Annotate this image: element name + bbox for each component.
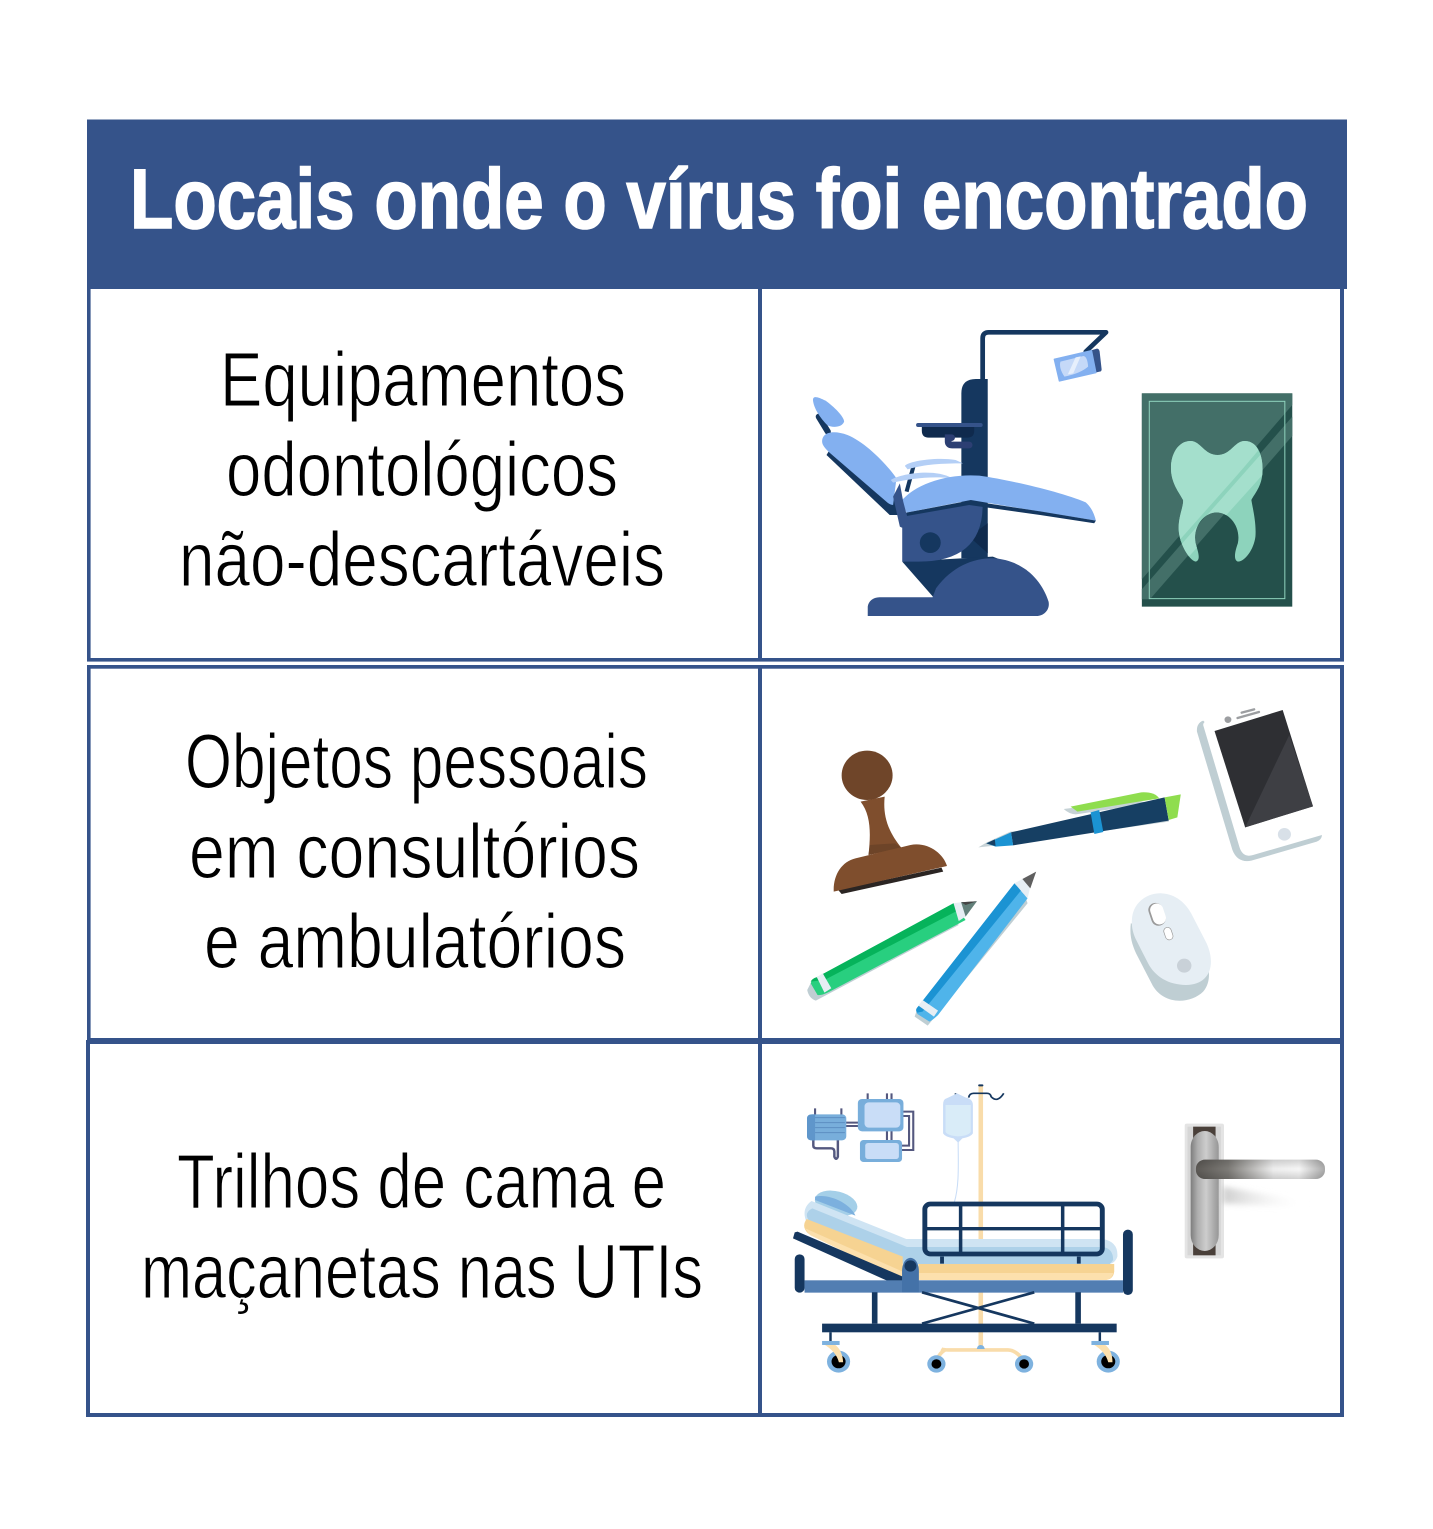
text: bed rails and door handles: Trilhos de cama e (177, 1139, 666, 1225)
text: personal objects: em consultórios (189, 809, 640, 895)
text: dental equipment: odontológicos (226, 427, 618, 513)
icon: iv drip stand (927, 1084, 1033, 1373)
title banner (87, 120, 1347, 289)
text: dental equipment: Equipamentos (220, 337, 626, 423)
icon: rubber stamp (834, 751, 947, 894)
icon: computer mouse (1130, 893, 1211, 1001)
text: dental equipment: não-descartáveis (179, 517, 665, 603)
icon: blue pencil (915, 872, 1036, 1026)
table grid (86, 285, 1344, 1417)
icon: smartphone (1197, 702, 1322, 861)
icon: green pencil (807, 901, 977, 1001)
text: personal objects: e ambulatórios (204, 899, 626, 985)
icon: dental chair (813, 332, 1106, 616)
icon: medical monitors (807, 1093, 913, 1162)
icon: tooth x-ray (1142, 393, 1292, 607)
text: bed rails and door handles (141, 1139, 703, 1315)
text: dental equipment (179, 337, 665, 603)
text: personal objects: Objetos pessoais (185, 719, 648, 805)
text: bed rails and door handles: maçanetas nas UTIs (141, 1229, 703, 1315)
icon: door handle (1185, 1124, 1325, 1258)
text: personal objects (185, 719, 648, 985)
icon: pen (978, 792, 1181, 847)
icon: hospital bed (793, 1186, 1133, 1373)
